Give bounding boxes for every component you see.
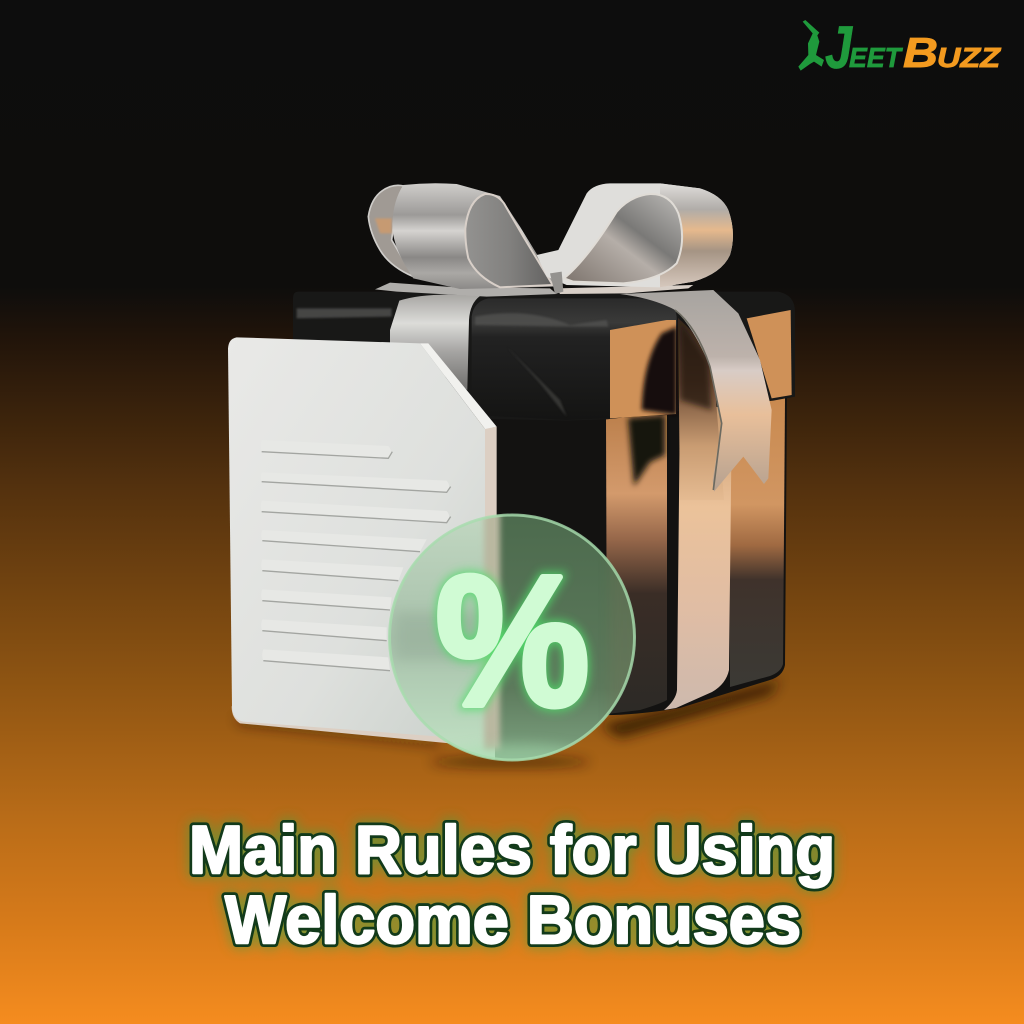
floor shadows xyxy=(235,680,780,766)
title text: Main Rules for Using xyxy=(189,812,835,888)
left bow loop back xyxy=(368,185,413,277)
ribbon tail xyxy=(620,290,772,492)
title outline xyxy=(189,812,835,958)
document thickness xyxy=(232,427,497,743)
title glow xyxy=(189,812,835,958)
bow knot xyxy=(550,272,563,294)
logo word: Jeet xyxy=(825,14,904,81)
left bow loop xyxy=(392,183,557,289)
title xyxy=(189,812,835,958)
document chamfer edge xyxy=(420,343,497,429)
gift box xyxy=(293,183,795,725)
document text lines xyxy=(261,440,449,671)
copper reflection right panel xyxy=(730,398,785,687)
title text: Welcome Bonuses xyxy=(225,882,801,958)
lid copper facet xyxy=(610,320,676,418)
box lid xyxy=(293,283,795,421)
title glow: Main Rules for Using xyxy=(189,812,835,888)
percent sign: % xyxy=(436,537,589,745)
lid left highlight xyxy=(297,308,392,318)
icon: cricket batsman xyxy=(798,20,824,71)
logo xyxy=(798,14,1001,81)
title outline: Welcome Bonuses xyxy=(225,882,801,958)
lid base xyxy=(293,292,795,421)
logo word: Buzz: UZZ xyxy=(937,42,1001,73)
document icon xyxy=(228,337,497,743)
document line shadows xyxy=(262,452,451,671)
logo word: Jeet: J xyxy=(825,14,853,81)
vertical ribbon xyxy=(664,400,732,710)
coin body xyxy=(389,514,635,760)
bow xyxy=(368,183,733,294)
logo word: Buzz: B xyxy=(903,29,938,76)
logo word: Buzz xyxy=(903,29,1001,76)
title glow: Welcome Bonuses xyxy=(225,882,801,958)
ribbon fold behind tail xyxy=(678,318,724,500)
box body xyxy=(490,395,787,725)
left bow inner xyxy=(465,194,553,287)
title outline: Main Rules for Using xyxy=(189,812,835,888)
lid front face xyxy=(472,298,677,420)
lid top ribbon strips xyxy=(375,283,557,297)
left ribbon band xyxy=(390,295,480,390)
right bow inner xyxy=(564,194,682,283)
title text xyxy=(189,812,835,958)
logo word: Jeet: EET xyxy=(849,42,904,73)
right bow loop end xyxy=(660,183,733,287)
lid front highlights xyxy=(475,313,608,327)
lid facet shadow xyxy=(642,327,677,415)
right bow loop base xyxy=(537,183,733,287)
lid right copper face xyxy=(747,310,792,398)
document face xyxy=(228,337,485,740)
fold shadow xyxy=(680,320,712,410)
coin rim xyxy=(390,515,634,760)
shadow on copper panel xyxy=(628,415,665,486)
copper reflection left panel xyxy=(606,412,667,714)
discount coin xyxy=(388,514,636,762)
percent glow: % xyxy=(436,537,589,745)
